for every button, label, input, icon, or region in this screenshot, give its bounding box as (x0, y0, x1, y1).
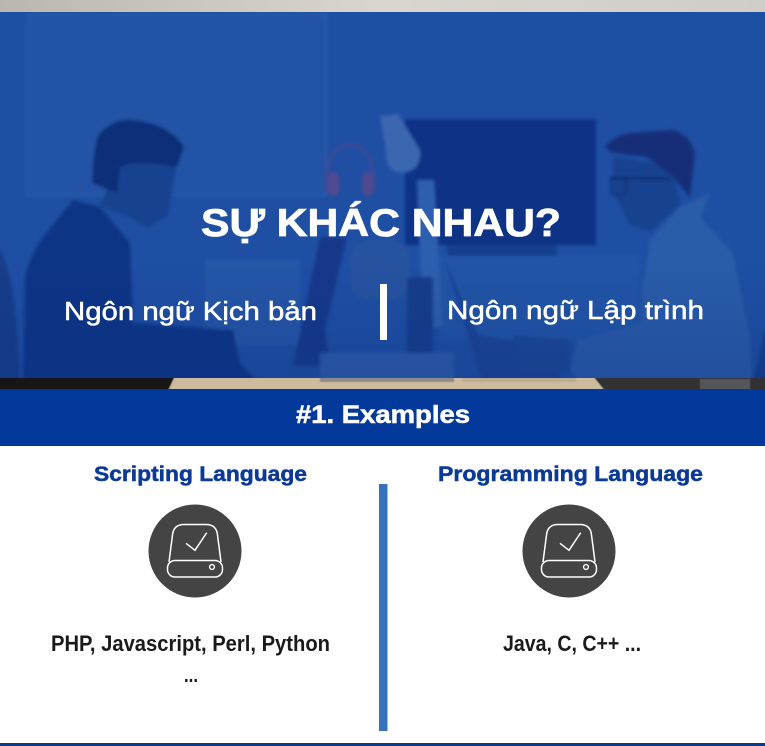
hero panel (0, 12, 765, 385)
heading: programming language: Programming Language (438, 462, 703, 486)
section heading: #1. Examples (296, 401, 470, 429)
subtitle: scripting: Ngôn ngữ Kịch bản (64, 296, 317, 326)
left man hair (92, 120, 184, 193)
right man glasses (610, 178, 670, 179)
title: SỰ KHÁC NHAU? (201, 201, 561, 245)
plant (350, 240, 410, 300)
monitor stand (447, 245, 557, 256)
section banner (0, 389, 765, 446)
wall cabinet (205, 260, 300, 345)
background photo: office scene (0, 15, 765, 385)
iMac back (293, 237, 347, 366)
headphones (326, 145, 374, 192)
bottom photo strip (0, 376, 765, 391)
column divider (379, 484, 388, 731)
lower shading (0, 260, 765, 378)
bottom edge bar (0, 743, 765, 746)
desk lamp (380, 114, 420, 173)
right man face (613, 157, 680, 232)
panel: programming language (438, 462, 703, 656)
bottle (407, 277, 433, 355)
heading: scripting language: Scripting Language (94, 462, 307, 486)
iMac right (417, 180, 443, 327)
laptop (450, 274, 560, 378)
icon: drive with check (522, 504, 616, 598)
text: ellipsis: ... (184, 665, 198, 687)
right man hair (605, 130, 695, 197)
icon: drive with check (148, 504, 242, 598)
subtitle: programming: Ngôn ngữ Lập trình (447, 295, 704, 325)
right edge person (754, 331, 765, 378)
left man face (100, 163, 177, 228)
hero divider (380, 284, 387, 340)
left man body (23, 200, 260, 385)
right man hoodie (570, 193, 752, 385)
text: scripting examples: PHP, Javascript, Perl, Python (51, 631, 330, 656)
top photo strip (0, 0, 765, 12)
keyboard on desk (319, 352, 454, 378)
text: programming examples: Java, C, C++ ... (503, 631, 641, 656)
far left shadow (0, 250, 20, 385)
whiteboard (28, 15, 326, 195)
right man hands (514, 336, 568, 370)
panel: scripting language (51, 462, 330, 687)
dark monitor (405, 119, 596, 245)
